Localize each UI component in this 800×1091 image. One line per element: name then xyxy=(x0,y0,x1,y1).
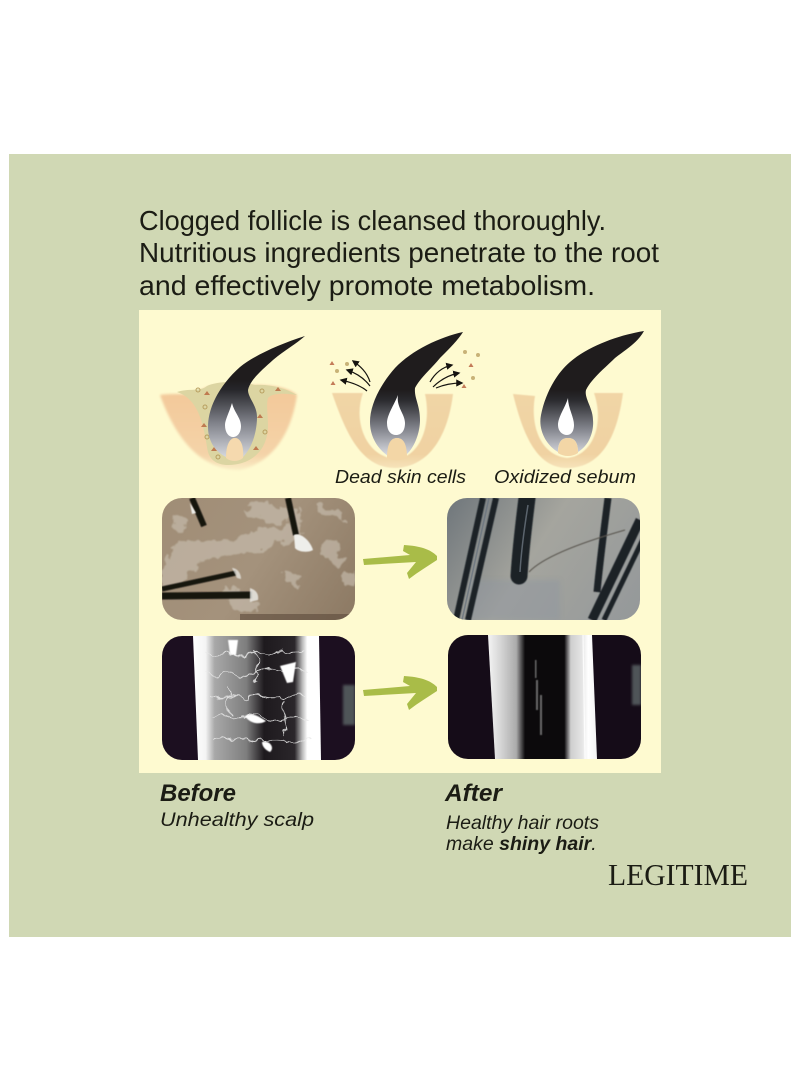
exfoliation arrows xyxy=(341,361,462,391)
removed particles xyxy=(330,350,480,388)
heading xyxy=(139,205,659,301)
hair xyxy=(540,331,644,452)
diagram: clogged follicle xyxy=(160,336,305,470)
diagram: clean follicle xyxy=(513,331,644,468)
diagram: dead skin cells exfoliated xyxy=(330,332,480,468)
photo: rough hair shaft xyxy=(162,636,355,760)
caption: before xyxy=(160,780,314,831)
photo: healthy scalp xyxy=(447,498,645,620)
caption: after: Healthy hair roots xyxy=(446,812,599,834)
brand: LEGITIME: LEGITIME xyxy=(608,857,748,892)
label: oxidized sebum: Oxidized sebum xyxy=(494,466,636,487)
sebum particles xyxy=(196,388,267,459)
hair xyxy=(370,332,463,456)
photo: smooth hair shaft xyxy=(448,635,641,759)
green background panel xyxy=(9,154,791,937)
caption: before: Unhealthy scalp xyxy=(160,809,314,831)
heading: and effectively promote metabolism. xyxy=(139,270,595,301)
heading: Clogged follicle is cleansed thoroughly. xyxy=(139,205,606,236)
caption: after: After xyxy=(444,780,504,807)
label: dead skin cells: Dead skin cells xyxy=(335,466,466,487)
panel: cream diagram area xyxy=(139,310,661,773)
heading: Nutritious ingredients penetrate to the root xyxy=(139,237,659,268)
caption: after xyxy=(444,780,599,855)
arrow: bottom xyxy=(363,676,437,710)
arrow: top xyxy=(363,545,437,579)
caption: after: make shiny hair. xyxy=(446,833,597,855)
photo: unhealthy scalp xyxy=(162,498,355,620)
caption: before: Before xyxy=(160,780,236,807)
hair xyxy=(208,336,305,457)
